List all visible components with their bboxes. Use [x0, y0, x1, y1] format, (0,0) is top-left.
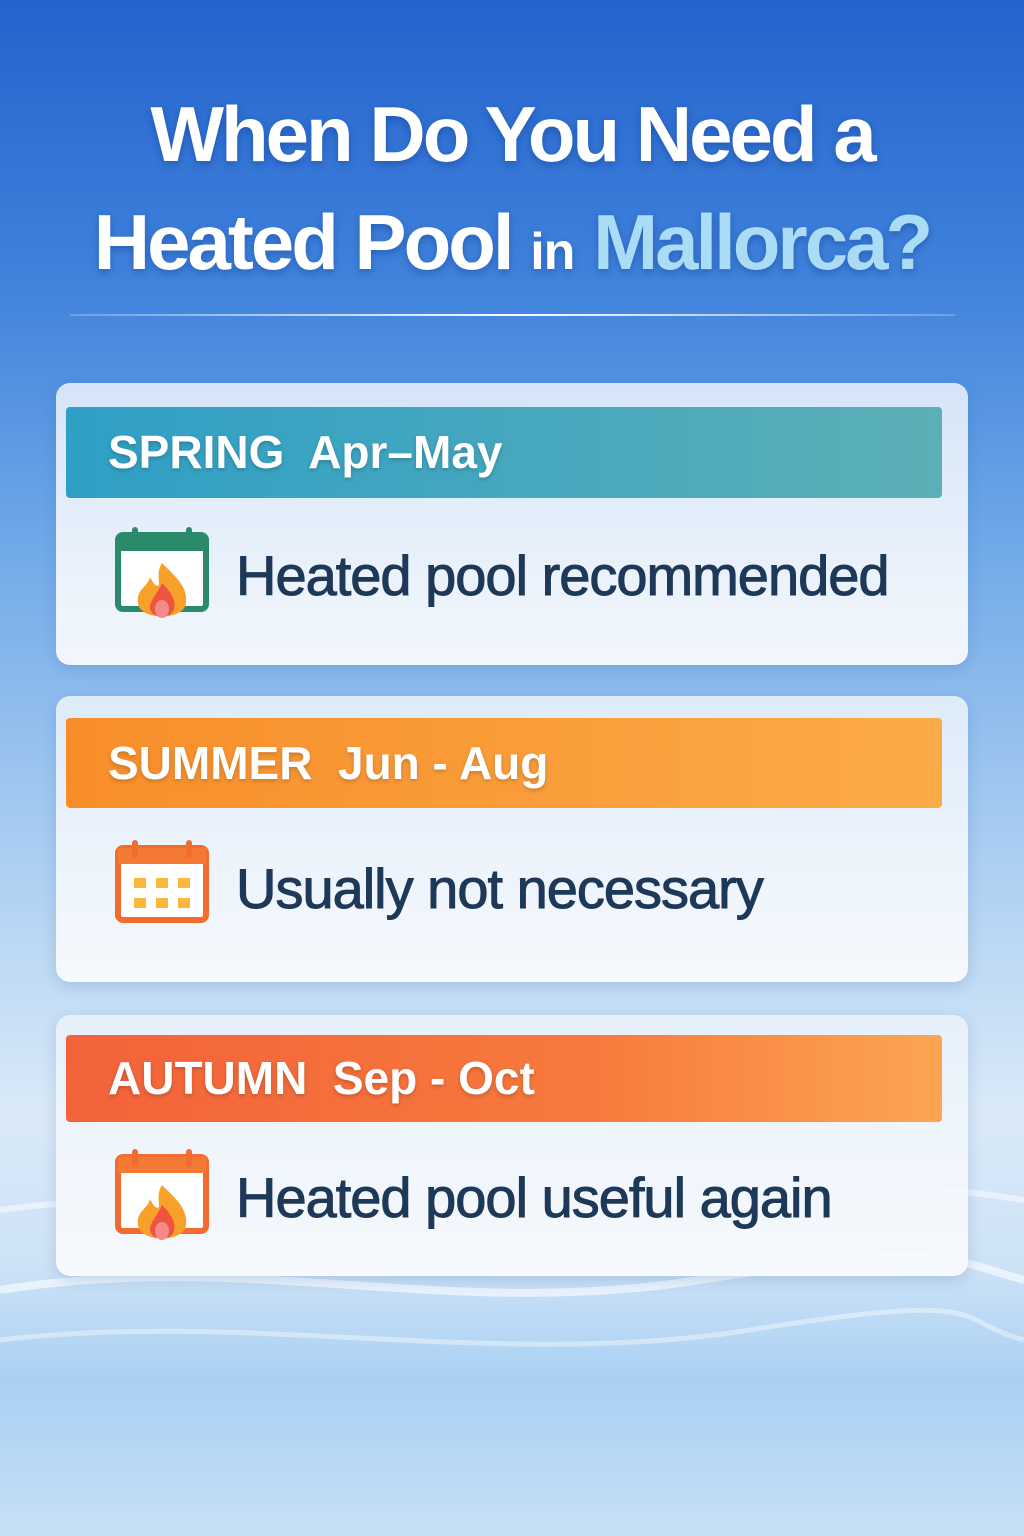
- icon: calendar with flame: [115, 1149, 209, 1240]
- panel: spring: [56, 383, 968, 665]
- icon: calendar with flame: [115, 527, 209, 618]
- panel: autumn: [56, 1015, 968, 1276]
- text: autumn: Heated pool useful again: [236, 1166, 832, 1229]
- header: spring: SPRING Apr–May: [108, 426, 503, 478]
- header: summer: [66, 718, 942, 808]
- text: summer: Usually not necessary: [236, 857, 763, 920]
- text: When Do You Need a: [150, 90, 874, 178]
- header: spring: [66, 407, 942, 498]
- header: summer: SUMMER Jun - Aug: [108, 737, 548, 789]
- title: [94, 90, 931, 286]
- text: Heated Pool in Mallorca?: [94, 198, 930, 286]
- text: spring: Heated pool recommended: [236, 544, 889, 607]
- panel: summer: [56, 696, 968, 982]
- background waves: [0, 1189, 1024, 1347]
- header: autumn: [66, 1035, 942, 1122]
- header: autumn: AUTUMN Sep - Oct: [108, 1052, 535, 1104]
- icon: calendar: [115, 840, 209, 923]
